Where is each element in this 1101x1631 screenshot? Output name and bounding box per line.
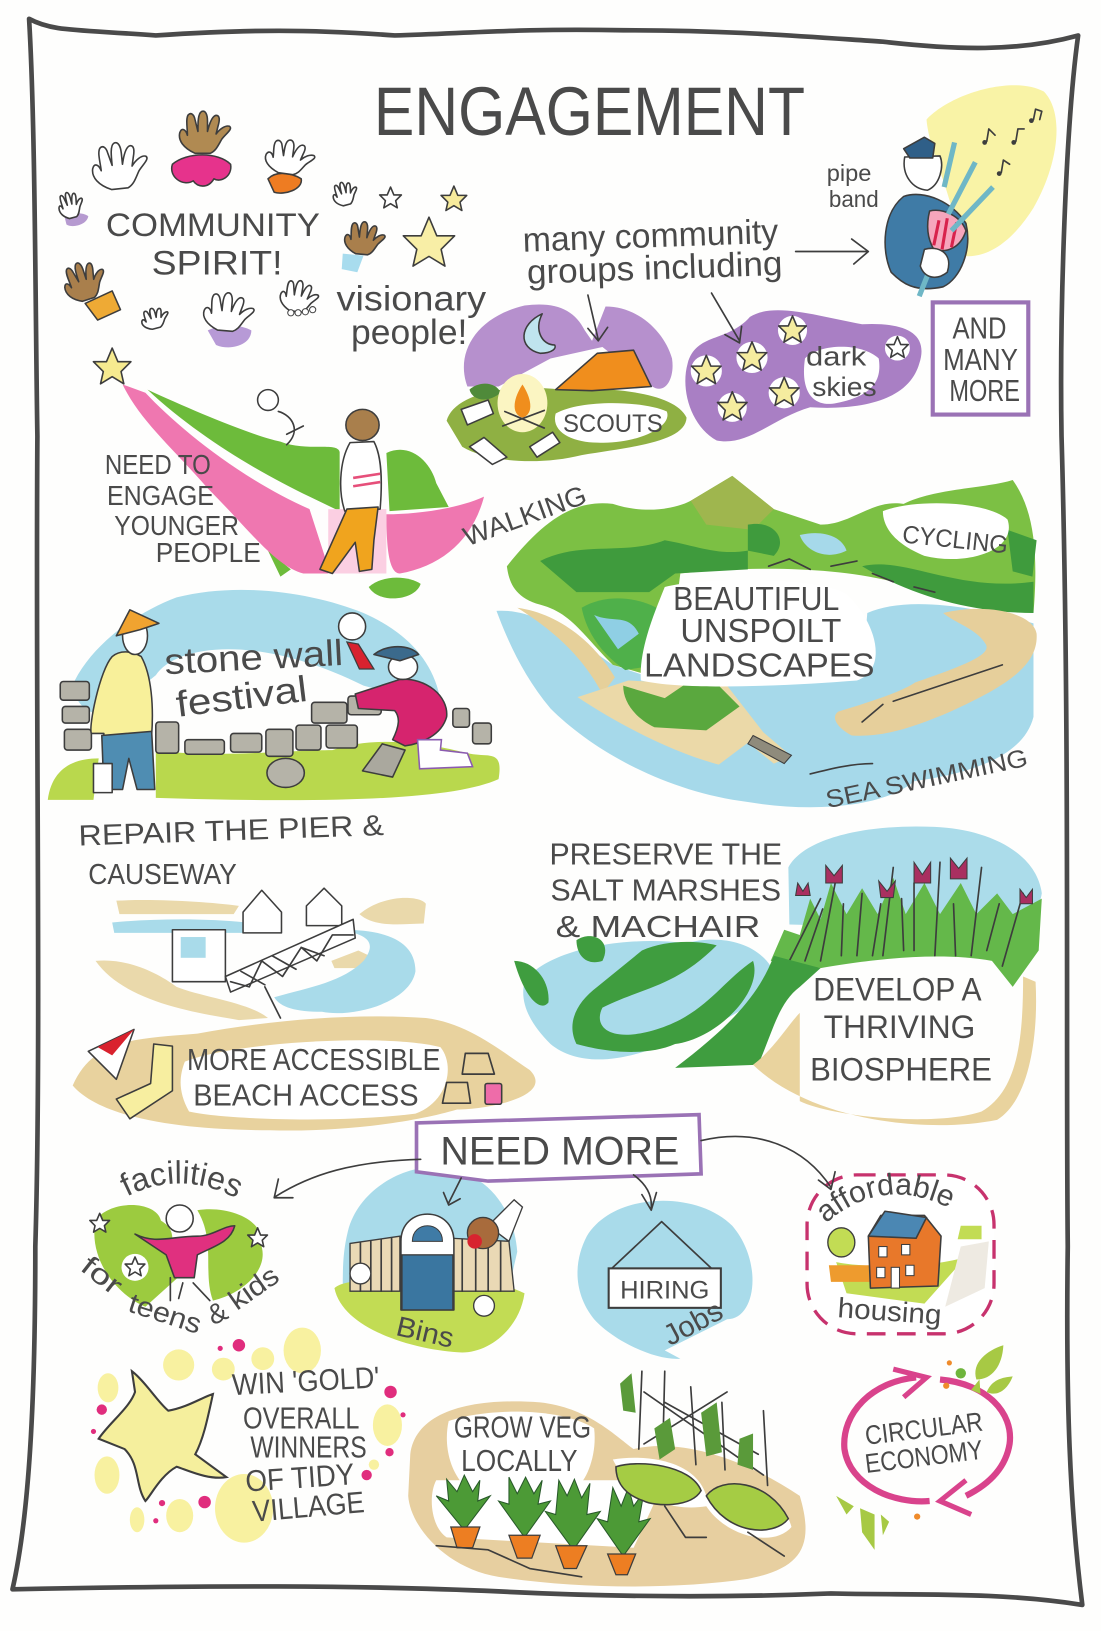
- stars: [691, 316, 910, 422]
- peninsula: [578, 680, 791, 765]
- teens and kids label: for: [75, 1250, 129, 1301]
- house: [868, 1211, 941, 1288]
- teens and kids label: &: [202, 1295, 233, 1331]
- landscapes label: UNSPOILT: [680, 613, 841, 650]
- blue sky: [75, 590, 441, 717]
- engage younger people text: [105, 449, 261, 568]
- star: [93, 348, 131, 384]
- young person: [320, 409, 381, 573]
- biosphere label: DEVELOP A: [813, 971, 982, 1007]
- walking label: WALKING: [459, 480, 590, 552]
- circular economy label: ECONOMY: [863, 1435, 985, 1479]
- cycling label: CYCLING: [901, 520, 1009, 559]
- title: ENGAGEMENT: [374, 73, 805, 150]
- engage younger people illustration: [93, 348, 484, 598]
- engage younger people text: ENGAGE: [107, 480, 214, 511]
- bins illustration: [334, 1167, 525, 1354]
- deck chair: [116, 1044, 172, 1119]
- and many more box: MANY: [943, 344, 1018, 377]
- leaves: [836, 1345, 1013, 1550]
- yellow star: [99, 1371, 226, 1501]
- fence and climbing beans: [620, 1371, 768, 1485]
- dark skies label: dark: [806, 342, 867, 372]
- community spirit text: COMMUNITY: [106, 207, 320, 243]
- visionary people text: visionary: [337, 280, 486, 319]
- marsh water: [523, 940, 771, 1059]
- salt marshes label: & MACHAIR: [556, 911, 760, 944]
- scouts label: [555, 403, 667, 443]
- label backing: [447, 1412, 595, 1488]
- landscapes label: LANDSCAPES: [644, 647, 875, 684]
- green ground: [447, 388, 687, 461]
- circular arrows: [844, 1377, 1010, 1501]
- dark skies illustration: [685, 310, 922, 441]
- icon: brown hand with pink cuff: [172, 111, 231, 186]
- teens and kids label: [75, 1250, 285, 1340]
- pipe band label: pipe: [827, 160, 871, 186]
- many community groups label: groups including: [526, 245, 783, 292]
- circular economy label: [863, 1407, 985, 1479]
- icon: white hand with orange cuff: [264, 137, 317, 193]
- beach access label: [187, 1044, 440, 1112]
- community spirit text: SPIRIT!: [152, 244, 283, 282]
- facilities label: facilities: [120, 1160, 241, 1196]
- win gold label: WINNERS: [250, 1431, 367, 1464]
- and many more box: MORE: [949, 375, 1020, 408]
- and many more box: [933, 302, 1028, 415]
- engage younger people text: PEOPLE: [156, 537, 261, 568]
- man with hat: [91, 610, 159, 793]
- icon: small dark star: [380, 187, 401, 208]
- sand castles and bucket: [442, 1053, 502, 1104]
- pier structure: [172, 888, 355, 992]
- festival label: stone wall: [163, 632, 344, 682]
- reeds: [771, 878, 1042, 987]
- pink dots: [91, 1339, 406, 1523]
- pink ribbon: [123, 384, 484, 573]
- grow veg illustration: [408, 1371, 806, 1586]
- sea swimming label: SEA SWIMMING: [823, 744, 1030, 814]
- icon: tiny white hand: [139, 305, 171, 331]
- marsh islands: [514, 936, 755, 1052]
- win gold illustration: [91, 1328, 406, 1543]
- logs: [461, 400, 560, 464]
- many community groups label: many community: [522, 213, 780, 260]
- icon: small yellow star: [441, 186, 467, 211]
- arrow to dark skies: [711, 293, 742, 343]
- kite: [88, 1029, 134, 1079]
- beach access illustration: [73, 1016, 536, 1130]
- sand: [753, 976, 1036, 1125]
- win gold label: OVERALL: [243, 1402, 359, 1435]
- dark skies label: [806, 342, 877, 402]
- blue bin: [401, 1214, 454, 1310]
- green hill: [147, 390, 449, 577]
- hiring sign: [609, 1222, 721, 1308]
- music notes: [982, 109, 1042, 176]
- purple night sky: [464, 304, 673, 389]
- need more box: NEED MORE: [440, 1129, 679, 1173]
- engage younger people text: YOUNGER: [114, 510, 239, 541]
- circular economy label: CIRCULAR: [863, 1407, 985, 1451]
- piper: [885, 137, 993, 296]
- landscapes label: [644, 581, 875, 684]
- grass and road: [836, 1226, 982, 1304]
- flowers: [350, 1263, 494, 1316]
- grow veg label: LOCALLY: [461, 1445, 578, 1478]
- grass: [48, 742, 500, 800]
- child: [339, 613, 374, 669]
- festival label: [163, 632, 344, 725]
- orange tent: [556, 350, 651, 391]
- circular economy illustration: [836, 1345, 1013, 1550]
- icon: white hand with rings: [278, 278, 321, 316]
- repair the pier label: [78, 810, 384, 891]
- yellow sun: [927, 85, 1057, 256]
- sand background: [408, 1401, 806, 1586]
- teens and kids label: kids: [222, 1259, 285, 1316]
- small green patch: [369, 578, 421, 598]
- need more box: [417, 1115, 701, 1181]
- affordable housing illustration: [805, 1172, 996, 1336]
- dark bush: [469, 384, 501, 399]
- arrow to piper: [796, 239, 868, 264]
- lettuces: [616, 1464, 788, 1530]
- landscapes illustration: [496, 476, 1037, 807]
- arrow to facilities: [274, 1159, 421, 1198]
- causeway: [748, 736, 791, 764]
- stones: [60, 682, 491, 756]
- icon: small white hand: [330, 179, 360, 208]
- bins label: Bins: [393, 1310, 457, 1354]
- housing label: housing: [837, 1292, 943, 1330]
- garden soil lines: [436, 1506, 784, 1577]
- and many more box: AND: [952, 313, 1006, 346]
- affordable label: affordable: [819, 1172, 952, 1222]
- text backing: [641, 580, 876, 686]
- water: [496, 604, 1033, 807]
- biosphere label: THRIVING: [824, 1009, 975, 1045]
- win gold label: VILLAGE: [251, 1486, 366, 1529]
- green land: [507, 476, 1035, 675]
- jobs label: Jobs: [658, 1295, 728, 1352]
- biosphere label: [810, 971, 992, 1087]
- hiring illustration: [577, 1201, 753, 1359]
- arrow to scouts: [588, 295, 608, 341]
- carrots: [436, 1475, 650, 1575]
- landscapes label: BEAUTIFUL: [673, 581, 839, 618]
- sky: [788, 826, 1042, 930]
- salt marshes label: [549, 838, 782, 944]
- small inlet: [582, 598, 665, 670]
- teens and kids label: teens: [125, 1287, 206, 1340]
- beach access label: BEACH ACCESS: [193, 1079, 419, 1112]
- icon: small hand with purple cuff: [55, 189, 88, 226]
- win gold label: WIN 'GOLD': [231, 1361, 380, 1402]
- sand spit left: [517, 608, 615, 694]
- pipe band: [885, 85, 1057, 296]
- pipe band label: [827, 160, 879, 212]
- dark skies label: skies: [812, 372, 877, 402]
- scouts illustration: [447, 304, 687, 464]
- pipe band label: band: [829, 186, 879, 212]
- icon: large yellow star: [403, 217, 455, 266]
- litter hand: [467, 1200, 522, 1249]
- pier illustration: [96, 888, 426, 1020]
- woman in magenta: [355, 647, 473, 777]
- arrow to jobs: [634, 1175, 656, 1210]
- visionary people text: [337, 280, 486, 352]
- arrow to housing: [701, 1136, 835, 1189]
- repair the pier label: REPAIR THE PIER &: [78, 810, 384, 853]
- community spirit text: [106, 207, 320, 282]
- camp fire: [498, 374, 547, 432]
- icon: brown hand with gold cuff: [59, 256, 120, 320]
- engage younger people text: NEED TO: [105, 449, 211, 480]
- salt marshes label: PRESERVE THE: [549, 838, 782, 871]
- grow veg label: [454, 1412, 591, 1478]
- beach access label: MORE ACCESSIBLE: [187, 1044, 440, 1077]
- sand right: [835, 609, 1037, 736]
- win gold label: OF TIDY: [244, 1458, 355, 1499]
- fence: [350, 1236, 514, 1291]
- biosphere illustration: [514, 826, 1042, 1125]
- hiring sign: HIRING: [620, 1276, 709, 1304]
- repair the pier label: CAUSEWAY: [88, 859, 237, 891]
- icon: white hand with purple cuff: [202, 291, 255, 347]
- biosphere label: BIOSPHERE: [810, 1051, 992, 1087]
- flowers: [796, 858, 1032, 904]
- community spirit hands and stars: [55, 111, 467, 347]
- scouts label: SCOUTS: [563, 410, 663, 438]
- tree and path: [828, 1228, 870, 1282]
- salt marshes label: SALT MARSHES: [550, 875, 781, 908]
- flower: [258, 390, 303, 445]
- visionary people text: people!: [351, 313, 467, 352]
- stone wall festival illustration: [48, 590, 500, 800]
- grow veg label: GROW VEG: [454, 1412, 591, 1445]
- festival label: festival: [174, 668, 310, 725]
- many community groups label: [522, 213, 783, 292]
- win gold label: [231, 1361, 380, 1529]
- icon: brown hand with blue cuff: [342, 220, 386, 272]
- icon: white hand: [90, 140, 150, 191]
- arrow to bins: [444, 1178, 461, 1205]
- village houses: [769, 559, 935, 592]
- stars: [90, 1213, 267, 1276]
- moon: [524, 314, 555, 353]
- person: [135, 1205, 235, 1301]
- facilities illustration: [75, 1160, 285, 1340]
- yellow blobs: [95, 1328, 402, 1543]
